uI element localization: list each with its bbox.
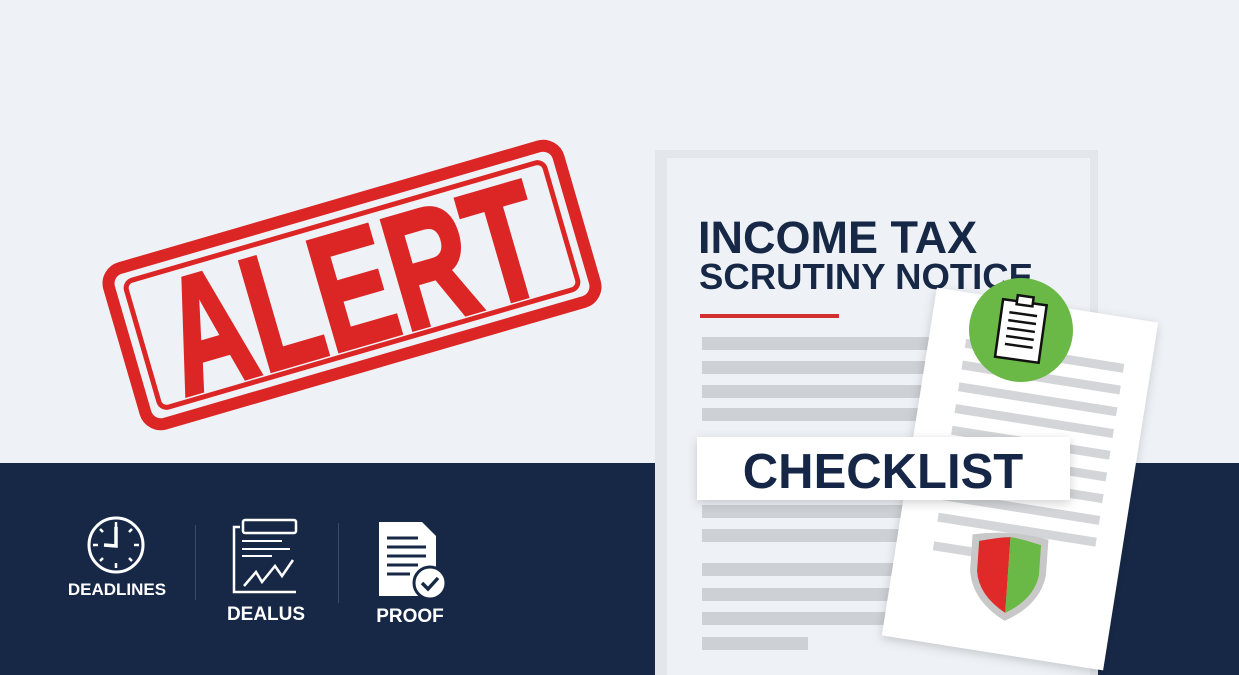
icon: clock / DEADLINES <box>68 518 166 599</box>
checklist banner <box>697 437 1070 500</box>
icon: proof document: PROOF <box>376 606 444 627</box>
checklist banner: CHECKLIST <box>743 445 1023 499</box>
title: INCOME TAX <box>698 212 977 263</box>
navy band <box>0 463 1239 675</box>
icon: clock / DEADLINES: DEADLINES <box>68 580 166 599</box>
rotated checklist paper <box>882 288 1158 670</box>
title: SCRUTINY NOTICE <box>699 256 1033 297</box>
icon: proof document <box>376 522 446 627</box>
icon: clipboard in green circle <box>969 278 1073 382</box>
stamp: ALERT: ALERT <box>143 147 564 431</box>
notice document <box>655 150 1098 675</box>
icon: report chart / DEALUS: DEALUS <box>227 604 305 625</box>
text lines <box>702 337 1002 650</box>
title <box>698 212 1033 297</box>
icon: report chart / DEALUS <box>227 520 305 625</box>
icon: shield <box>967 530 1049 624</box>
